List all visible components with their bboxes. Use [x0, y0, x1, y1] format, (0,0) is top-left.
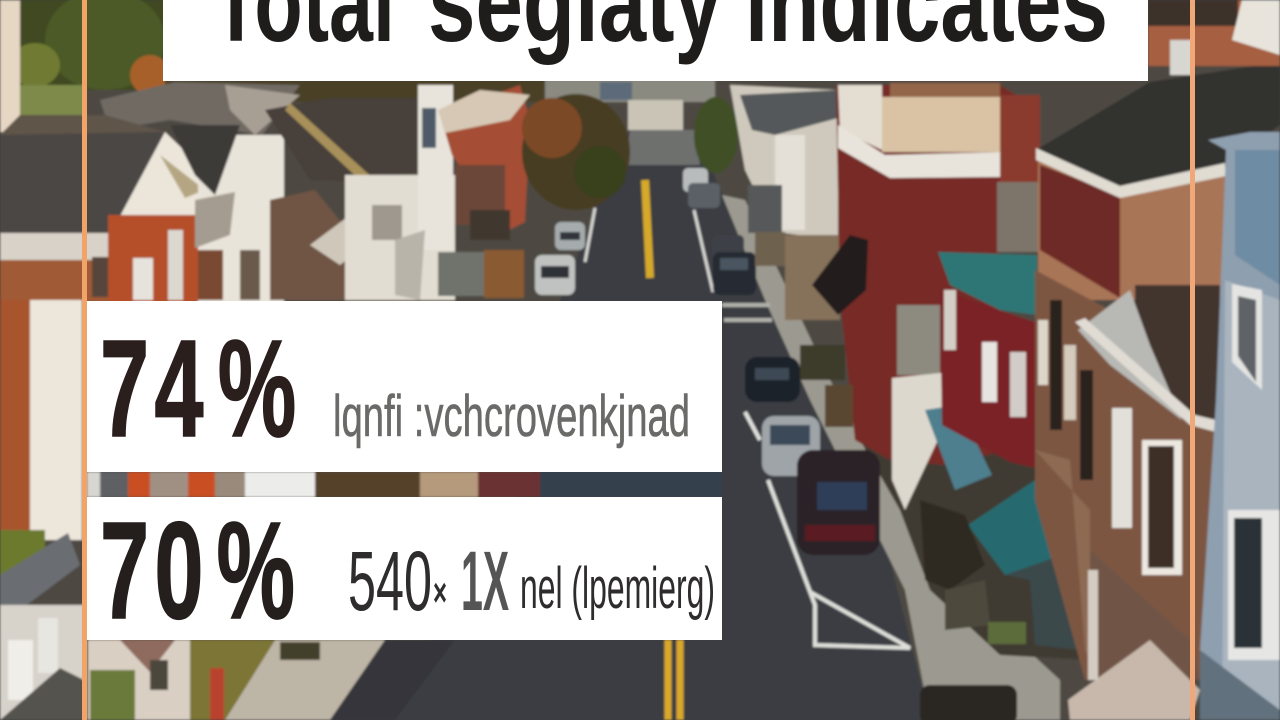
statistic caption: × — [433, 571, 447, 615]
tree line and horizon — [0, 0, 715, 132]
distant tree on right — [694, 97, 738, 173]
statistic value: 70% — [100, 493, 295, 648]
sidewalk lower left — [225, 640, 385, 720]
mid-road cars — [745, 357, 1017, 720]
lower left houses — [0, 300, 320, 720]
road markings — [585, 180, 910, 720]
title text — [212, 0, 1108, 65]
strip of buildings between panels — [87, 472, 722, 497]
right tan building — [1035, 62, 1280, 720]
parked cars far — [535, 168, 756, 295]
statistic caption: 540 — [348, 534, 432, 628]
orange vertical rule left — [82, 0, 87, 720]
sidewalk right — [722, 195, 1060, 720]
street tree — [522, 94, 630, 210]
statistic value: 74% — [100, 311, 296, 466]
burgundy building — [800, 83, 1085, 650]
left houses — [0, 82, 530, 303]
statistic caption: lqnfi :vchcrovenkjnad — [333, 384, 690, 449]
top right corner buildings — [1148, 0, 1280, 75]
right mid buildings — [730, 85, 840, 320]
statistic panel: 74% — [87, 301, 722, 472]
title banner — [163, 0, 1148, 81]
orange vertical rule right — [1190, 0, 1195, 720]
statistic caption: 1X — [461, 534, 509, 628]
blue-grey building far right — [1200, 132, 1280, 720]
shopfront base below burgundy building — [860, 440, 1090, 660]
statistic caption: nel (lpemierg) — [520, 556, 715, 621]
statistic caption — [348, 534, 715, 628]
road — [335, 130, 930, 720]
statistic panel: 70% — [87, 493, 722, 648]
